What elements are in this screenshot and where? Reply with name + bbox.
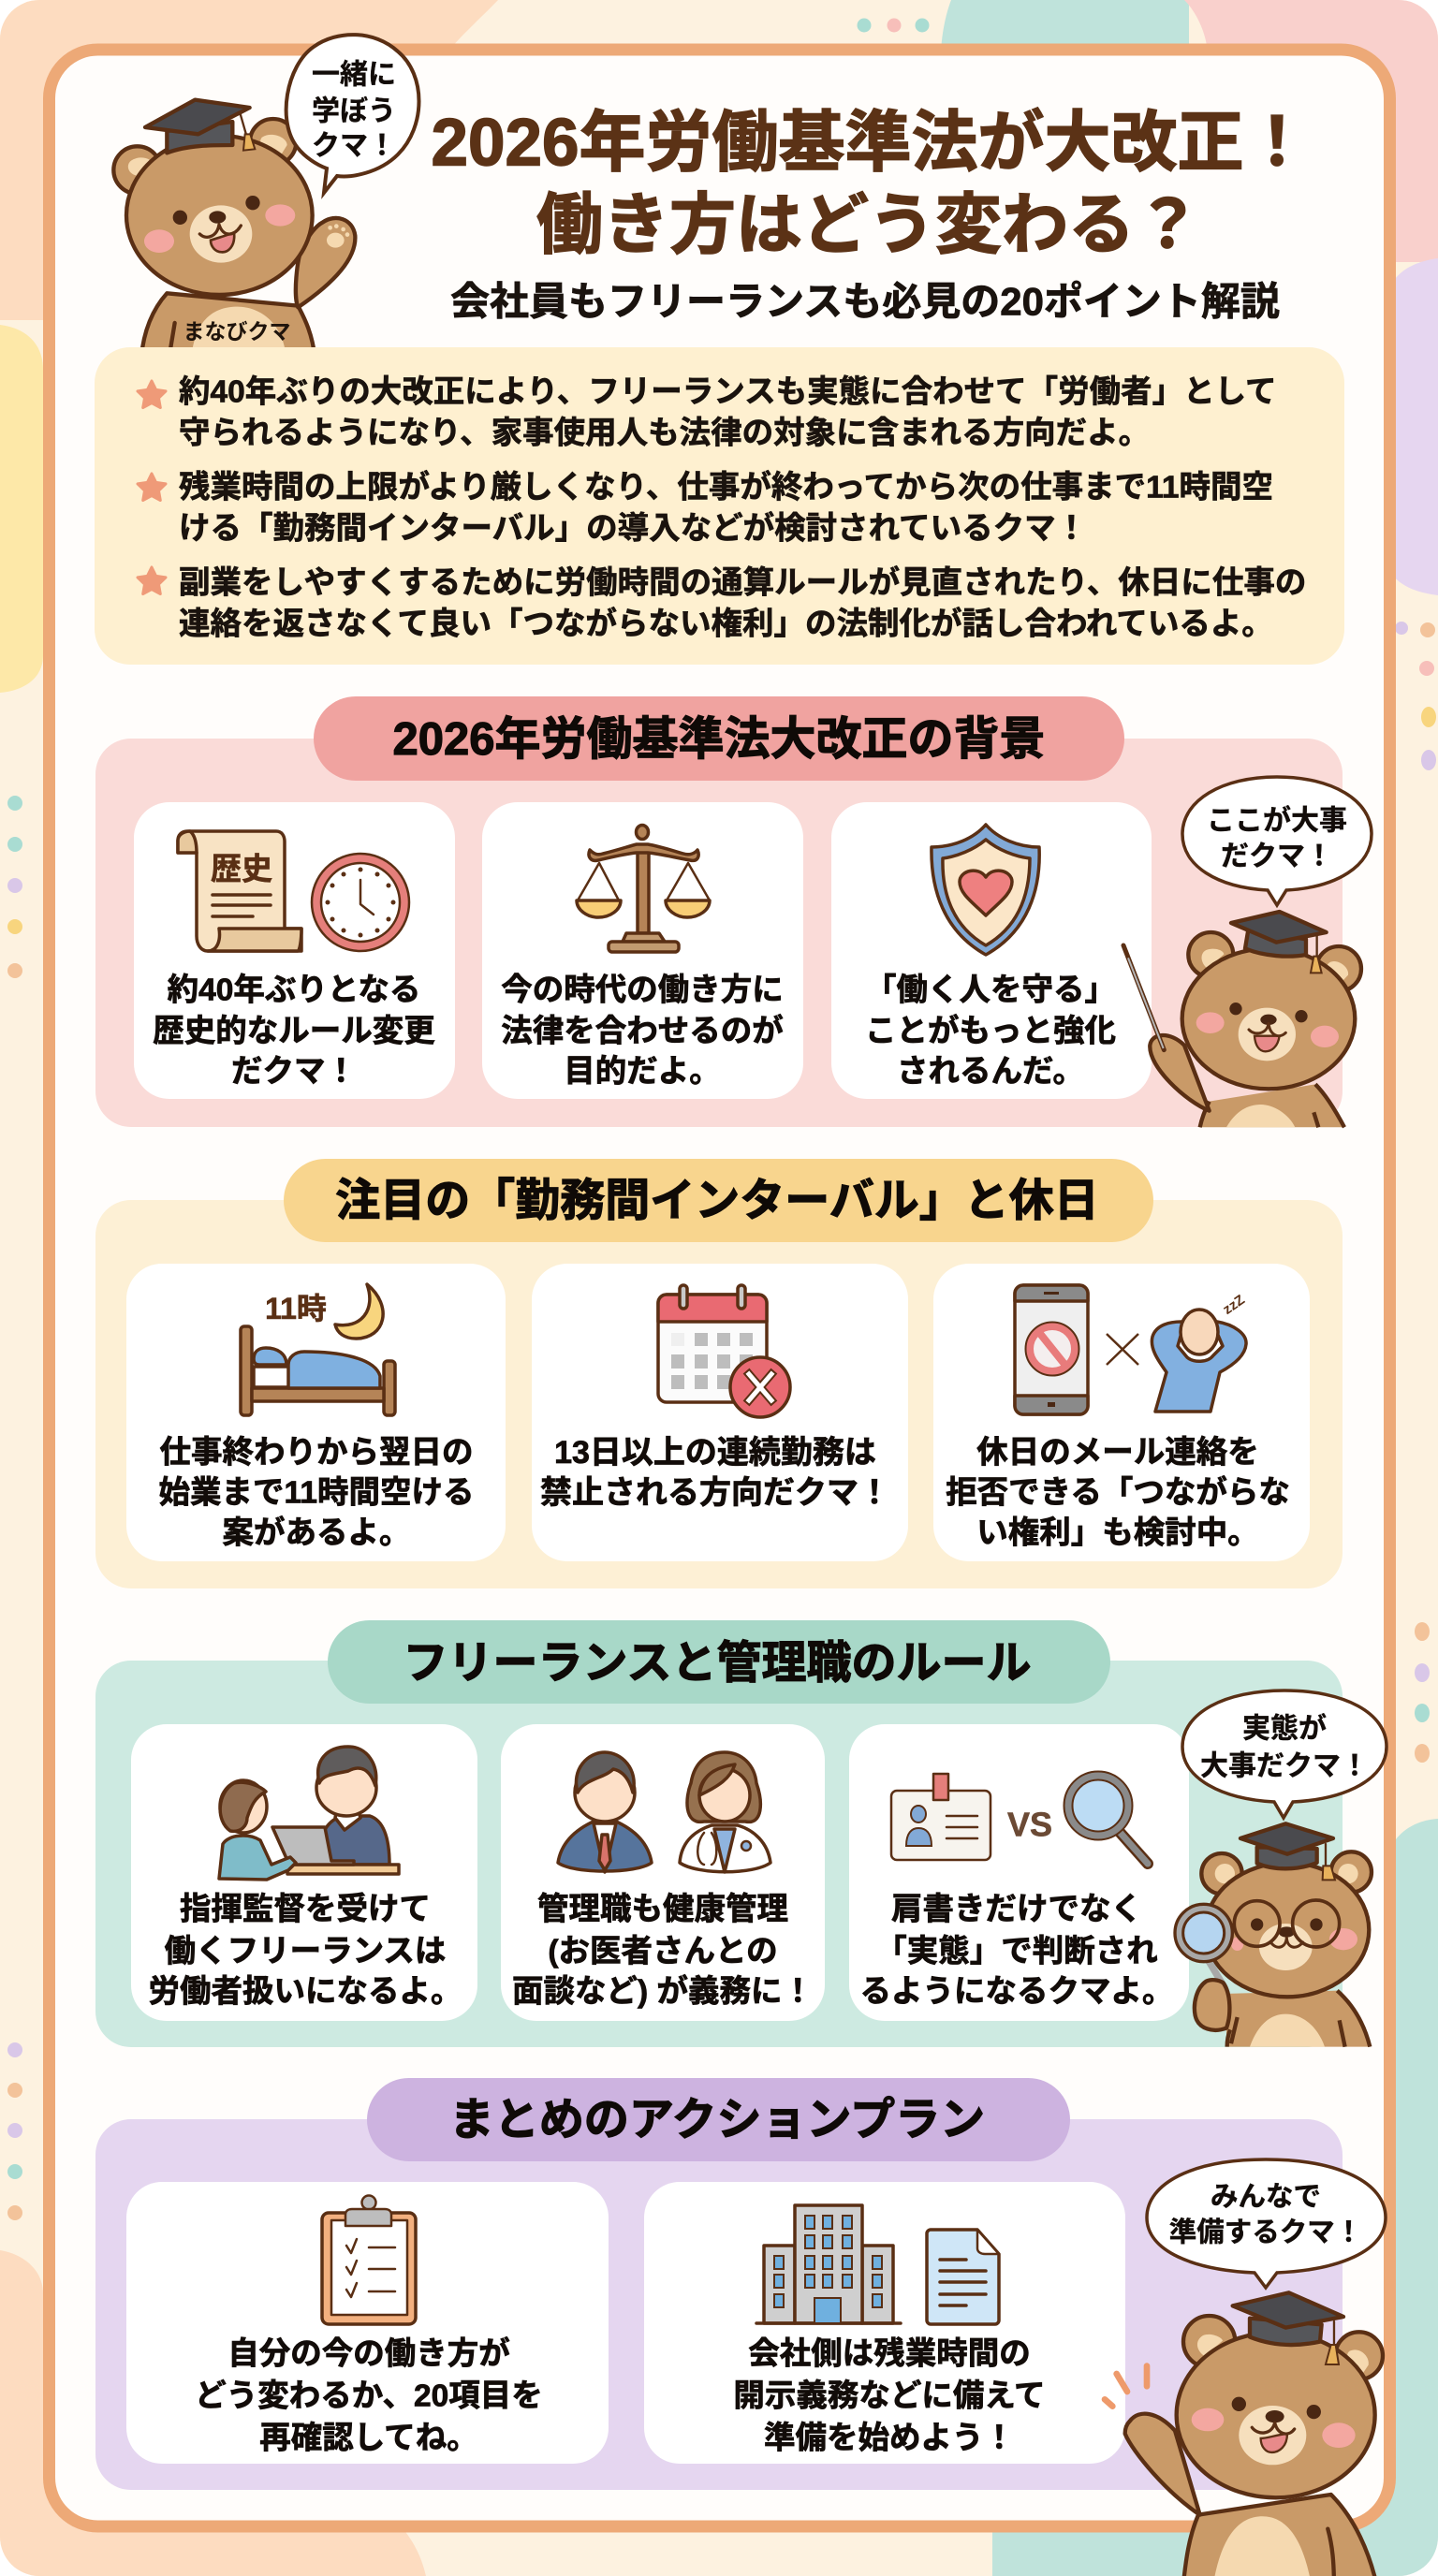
- card: consecutive work: 禁止される方向だクマ！: [540, 1475, 890, 1511]
- heading pill: interval: [284, 1159, 1153, 1242]
- speech bubble: this is important: [1182, 777, 1372, 905]
- label: mascot name: まなびクマ: [183, 319, 290, 344]
- title: 2026年労働基準法が大改正！: [432, 107, 1310, 180]
- card: real conditions: 「実態」で判断され: [875, 1934, 1158, 1969]
- card: company preparation: 会社側は残業時間の: [748, 2336, 1031, 2372]
- speech bubble: reality matters: 実態が: [1242, 1713, 1327, 1745]
- heading pill: freelance: フリーランスと管理職のルール: [403, 1638, 1032, 1689]
- panel: summary bullets: 約40年ぶりの大改正により、フリーランスも実態に合わせて「労働者」として: [179, 374, 1277, 410]
- speech bubble: this is important: だクマ！: [1221, 841, 1333, 872]
- title: 働き方はどう変わる？: [536, 189, 1201, 262]
- icon: relaxing person: [1152, 1292, 1248, 1412]
- card: protect workers: されるんだ。: [897, 1054, 1084, 1090]
- subtitle: 会社員もフリーランスも必見の20ポイント解説: [450, 279, 1280, 324]
- panel: background section: [95, 696, 1343, 1127]
- speech bubble: this is important: ここが大事: [1207, 805, 1347, 837]
- icon: balance scales: [577, 826, 710, 952]
- card: self check: [126, 2182, 609, 2464]
- card: managers health: 面談など) が義務に！: [512, 1973, 814, 2009]
- panel: freelance section: [95, 1620, 1343, 2047]
- icon: document: [927, 2230, 999, 2324]
- card: rest interval: [126, 1264, 506, 1561]
- card: consecutive work: [532, 1264, 908, 1561]
- text: VS: VS: [1007, 1805, 1052, 1844]
- icon: star 1: [138, 381, 166, 407]
- card: managers health: (お医者さんとの: [548, 1934, 778, 1969]
- card: history: [134, 802, 455, 1099]
- card: self check: どう変わるか、20項目を: [195, 2379, 543, 2413]
- panel: summary bullets: ける「勤務間インターバル」の導入などが検討されているクマ！: [179, 511, 1087, 547]
- card: self check: 再確認してね。: [259, 2421, 478, 2456]
- card: consecutive work: 13日以上の連続勤務は: [554, 1435, 876, 1471]
- card: real conditions: 肩書きだけでなく: [891, 1893, 1142, 1926]
- card: law purpose: [482, 802, 803, 1099]
- heading pill: action plan: [367, 2078, 1070, 2161]
- card: rest interval: 案があるよ。: [223, 1515, 410, 1550]
- mascot: detective bear: [1175, 1823, 1372, 2047]
- speech bubble: learn together: 一緒に: [312, 60, 396, 90]
- card: company preparation: [644, 2182, 1125, 2464]
- icon: doctor: [680, 1752, 770, 1872]
- card: right to disconnect: [933, 1264, 1310, 1561]
- speech bubble: reality matters: [1182, 1690, 1387, 1818]
- icon: two people at desk: [219, 1747, 399, 1880]
- icon: manager: [558, 1752, 652, 1872]
- title: [432, 107, 1310, 262]
- card: right to disconnect: い権利」も検討中。: [976, 1516, 1259, 1550]
- card: protect workers: ことがもっと強化: [865, 1013, 1116, 1048]
- card: right to disconnect: 休日のメール連絡を: [976, 1436, 1259, 1470]
- heading pill: action plan: まとめのアクションプラン: [449, 2095, 985, 2145]
- panel: summary bullets: [95, 347, 1344, 665]
- icon: shield with heart: [932, 825, 1039, 955]
- mascot: pointing bear: [1123, 912, 1361, 1127]
- card: protect workers: 「働く人を守る」: [865, 973, 1116, 1007]
- heading pill: freelance: [328, 1620, 1110, 1704]
- icon: scroll: [178, 831, 301, 951]
- card: company preparation: 開示義務などに備えて: [733, 2379, 1046, 2413]
- icon: clock: [312, 854, 409, 951]
- icon: cross mark: [1107, 1334, 1138, 1365]
- card: right to disconnect: 拒否できる「つながらな: [946, 1475, 1290, 1511]
- card: rest interval: 始業まで11時間空ける: [159, 1475, 474, 1511]
- speech bubble: reality matters: 大事だクマ！: [1200, 1750, 1369, 1782]
- card: law purpose: 目的だよ。: [564, 1054, 721, 1090]
- card: real conditions: [849, 1724, 1189, 2021]
- card: history: だクマ！: [231, 1054, 357, 1090]
- icon: bed with moon: 11時: [265, 1292, 327, 1325]
- speech bubble: prepare together: みんなで: [1211, 2181, 1321, 2213]
- card: law purpose: 今の時代の働き方に: [501, 973, 784, 1007]
- speech bubble: prepare together: [1147, 2159, 1386, 2288]
- icon: relaxing person: zzZ: [1220, 1292, 1248, 1318]
- panel: summary bullets: 連絡を返さなくて良い「つながらない権利」の法制化が話し合われているよ。: [179, 607, 1273, 642]
- panel: action plan section: [95, 2078, 1343, 2490]
- panel: summary bullets: 守られるようになり、家事使用人も法律の対象に含まれる方向だよ。: [179, 416, 1150, 451]
- card: company preparation: 準備を始めよう！: [764, 2421, 1015, 2456]
- icon: ID badge: [891, 1774, 990, 1860]
- panel: interval section: [95, 1159, 1343, 1588]
- speech bubble: learn together: クマ！: [312, 131, 396, 161]
- icon: clipboard: [322, 2196, 416, 2324]
- card: supervised freelance: [131, 1724, 477, 2021]
- card: law purpose: 法律を合わせるのが: [501, 1013, 784, 1048]
- icon: phone prohibited: [1015, 1285, 1088, 1414]
- card: supervised freelance: 指揮監督を受けて: [180, 1893, 431, 1926]
- icon: scroll: 歴史: [211, 852, 272, 886]
- icon: calendar with cross: [658, 1285, 790, 1417]
- card: self check: 自分の今の働き方が: [227, 2336, 510, 2372]
- card: history: 歴史的なルール変更: [153, 1015, 435, 1048]
- icon: star 2: [138, 474, 166, 500]
- card: rest interval: 仕事終わりから翌日の: [159, 1436, 474, 1470]
- card: managers health: 管理職も健康管理: [537, 1893, 788, 1926]
- panel: summary bullets: 副業をしやすくするために労働時間の通算ルールが見直されたり、休日に仕事の: [179, 565, 1306, 601]
- card: real conditions: るようになるクマよ。: [859, 1975, 1174, 2009]
- speech bubble: learn together: [286, 35, 419, 193]
- heading pill: background: 2026年労働基準法大改正の背景: [392, 714, 1046, 765]
- card: supervised freelance: 労働者扱いになるよ。: [148, 1975, 462, 2009]
- speech bubble: prepare together: 準備するクマ！: [1169, 2217, 1362, 2248]
- card: supervised freelance: 働くフリーランスは: [165, 1934, 446, 1969]
- icon: office building: [756, 2205, 901, 2323]
- icon: star 3: [138, 567, 166, 593]
- card: protect workers: [831, 802, 1152, 1099]
- speech bubble: learn together: 学ぼう: [312, 95, 396, 127]
- mascot: teaching bear top: [113, 100, 355, 359]
- icon: magnifier: [1064, 1771, 1148, 1864]
- heading pill: background: [314, 696, 1124, 781]
- mascot: waving bear: [1105, 2292, 1383, 2576]
- heading pill: interval: 注目の「勤務間インターバル」と休日: [335, 1176, 1099, 1226]
- card: history: 約40年ぶりとなる: [168, 973, 420, 1007]
- panel: summary bullets: 残業時間の上限がより厳しくなり、仕事が終わってから次の仕事まで11時間空: [179, 470, 1273, 505]
- card: managers health: [501, 1724, 825, 2021]
- icon: bed with moon: [241, 1284, 395, 1415]
